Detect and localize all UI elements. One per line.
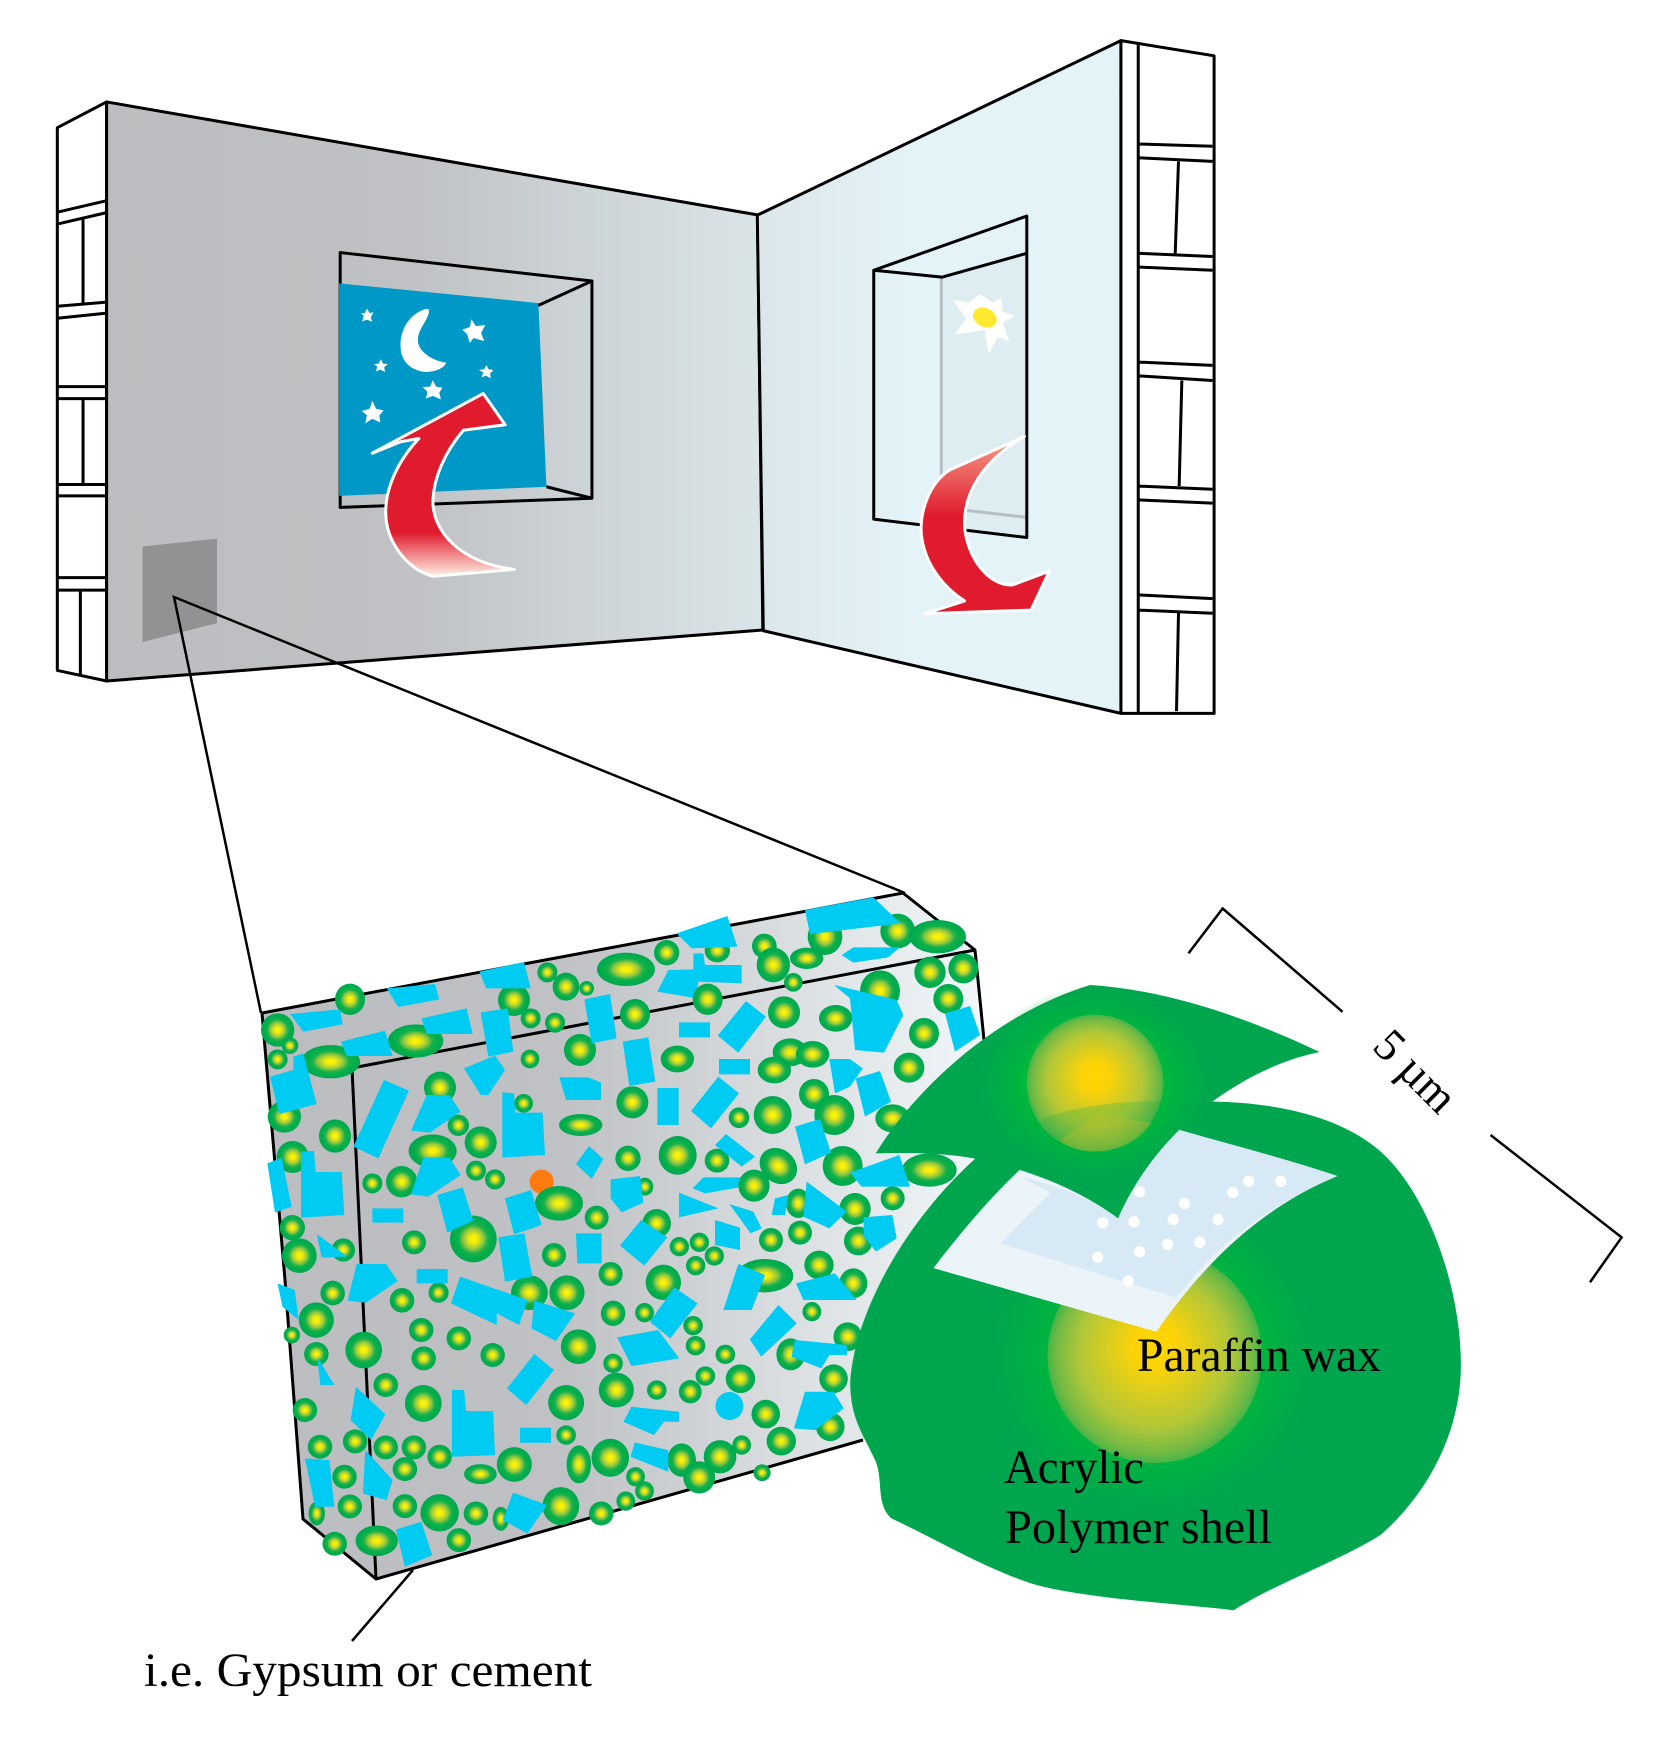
night window — [339, 253, 592, 507]
left wall surface — [107, 102, 763, 681]
arrow: heat released at night — [372, 394, 514, 576]
label: scale 5 µm: 5 µm — [1364, 1019, 1468, 1123]
label: paraffin wax: Paraffin wax — [1137, 1329, 1381, 1382]
cut-away sheet — [933, 1130, 1337, 1332]
shell highlight around lower core — [992, 1195, 1318, 1516]
microcapsules: left part — [261, 953, 671, 1312]
blue particles: right part — [657, 897, 980, 1310]
icon: moon — [401, 309, 446, 372]
paraffin core glow: lower — [1048, 1249, 1262, 1463]
panel: magnified microcapsule — [850, 908, 1622, 1610]
wall sample patch — [142, 539, 217, 642]
leader line to substrate label — [352, 1570, 413, 1641]
box body — [262, 893, 1000, 1579]
acrylic polymer shell — [850, 985, 1461, 1610]
right wall — [757, 41, 1214, 713]
day window — [874, 216, 1027, 538]
scale bracket — [1188, 908, 1622, 1282]
right wall brick end — [1121, 41, 1214, 713]
left wall brick end — [57, 102, 107, 681]
panel: wall cross-section box — [174, 597, 1000, 1641]
panel: room with two walls — [57, 41, 1214, 713]
left wall — [57, 102, 763, 681]
right wall surface — [757, 41, 1121, 713]
capsules over particles — [693, 984, 770, 1202]
label: acrylic: Acrylic — [1004, 1441, 1144, 1494]
capsule beside orange dot — [535, 1186, 583, 1221]
box outlines — [262, 893, 1000, 1579]
shell highlight around upper core — [978, 986, 1212, 1180]
label: polymer shell: Polymer shell — [1005, 1501, 1272, 1554]
icon: stars — [361, 309, 493, 423]
arrow: heat absorbed by day — [921, 436, 1049, 614]
capsule over particle — [514, 1094, 533, 1113]
orange marker dot — [530, 1170, 554, 1194]
microcapsules: right part — [646, 914, 978, 1300]
blue particles: left part — [267, 962, 679, 1303]
paraffin core glow: upper — [1027, 1015, 1163, 1152]
zoom leader lines — [174, 597, 905, 1013]
icon: sun — [953, 294, 1014, 354]
blue particles: bottom part — [278, 1277, 847, 1567]
label: substrate: i.e. Gypsum or cement — [144, 1644, 593, 1697]
wax dots — [1092, 1176, 1286, 1286]
microcapsules: bottom part — [284, 1275, 862, 1556]
